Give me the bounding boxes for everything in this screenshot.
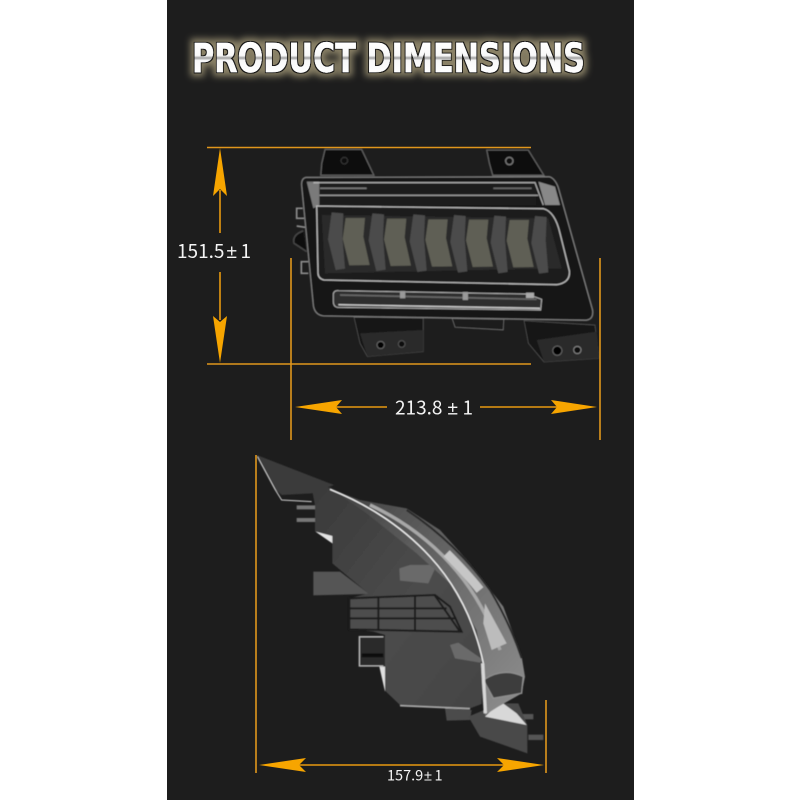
bottom fin and pins — [445, 702, 543, 753]
dimension: width 213.8 — [291, 258, 600, 440]
depth arrows — [259, 758, 544, 772]
lens highlights — [330, 489, 523, 713]
dimension: depth 157.9 — [256, 455, 546, 786]
side clips — [294, 208, 308, 273]
inner LED panel — [317, 206, 569, 285]
unlit LED blades — [328, 212, 548, 274]
main housing — [312, 487, 483, 708]
dimension: height 151.5 — [177, 148, 531, 364]
extension lines — [291, 258, 600, 440]
clear upper lens band — [307, 182, 560, 208]
title: PRODUCT DIMENSIONS — [192, 36, 585, 82]
upper mounting fin — [257, 455, 334, 520]
lower light guide bar — [333, 291, 542, 310]
width label: 213.8 — [395, 394, 442, 420]
height label: 151.5 — [177, 237, 224, 264]
lamp housing — [302, 177, 593, 320]
clear lens — [330, 488, 525, 715]
width label: ± — [448, 398, 458, 420]
housing clips — [399, 565, 483, 663]
panel: dark background — [167, 0, 634, 800]
depth label: 1 — [434, 764, 443, 786]
rear connector — [313, 572, 369, 595]
height label: ± — [226, 242, 237, 263]
bottom mounting brackets — [354, 317, 599, 362]
width label: 1 — [462, 394, 473, 420]
side view lamp photo — [257, 455, 543, 753]
height arrows — [213, 148, 227, 363]
extension lines — [256, 455, 546, 773]
lower plug — [359, 636, 385, 667]
top mounting brackets — [321, 149, 544, 175]
front view lamp photo — [294, 149, 599, 362]
ventilation grid — [349, 595, 462, 632]
height label: 1 — [240, 237, 251, 264]
width arrows — [295, 400, 597, 414]
depth label: 157.9 — [387, 764, 423, 786]
extension lines — [207, 148, 531, 364]
depth label: ± — [424, 768, 432, 784]
